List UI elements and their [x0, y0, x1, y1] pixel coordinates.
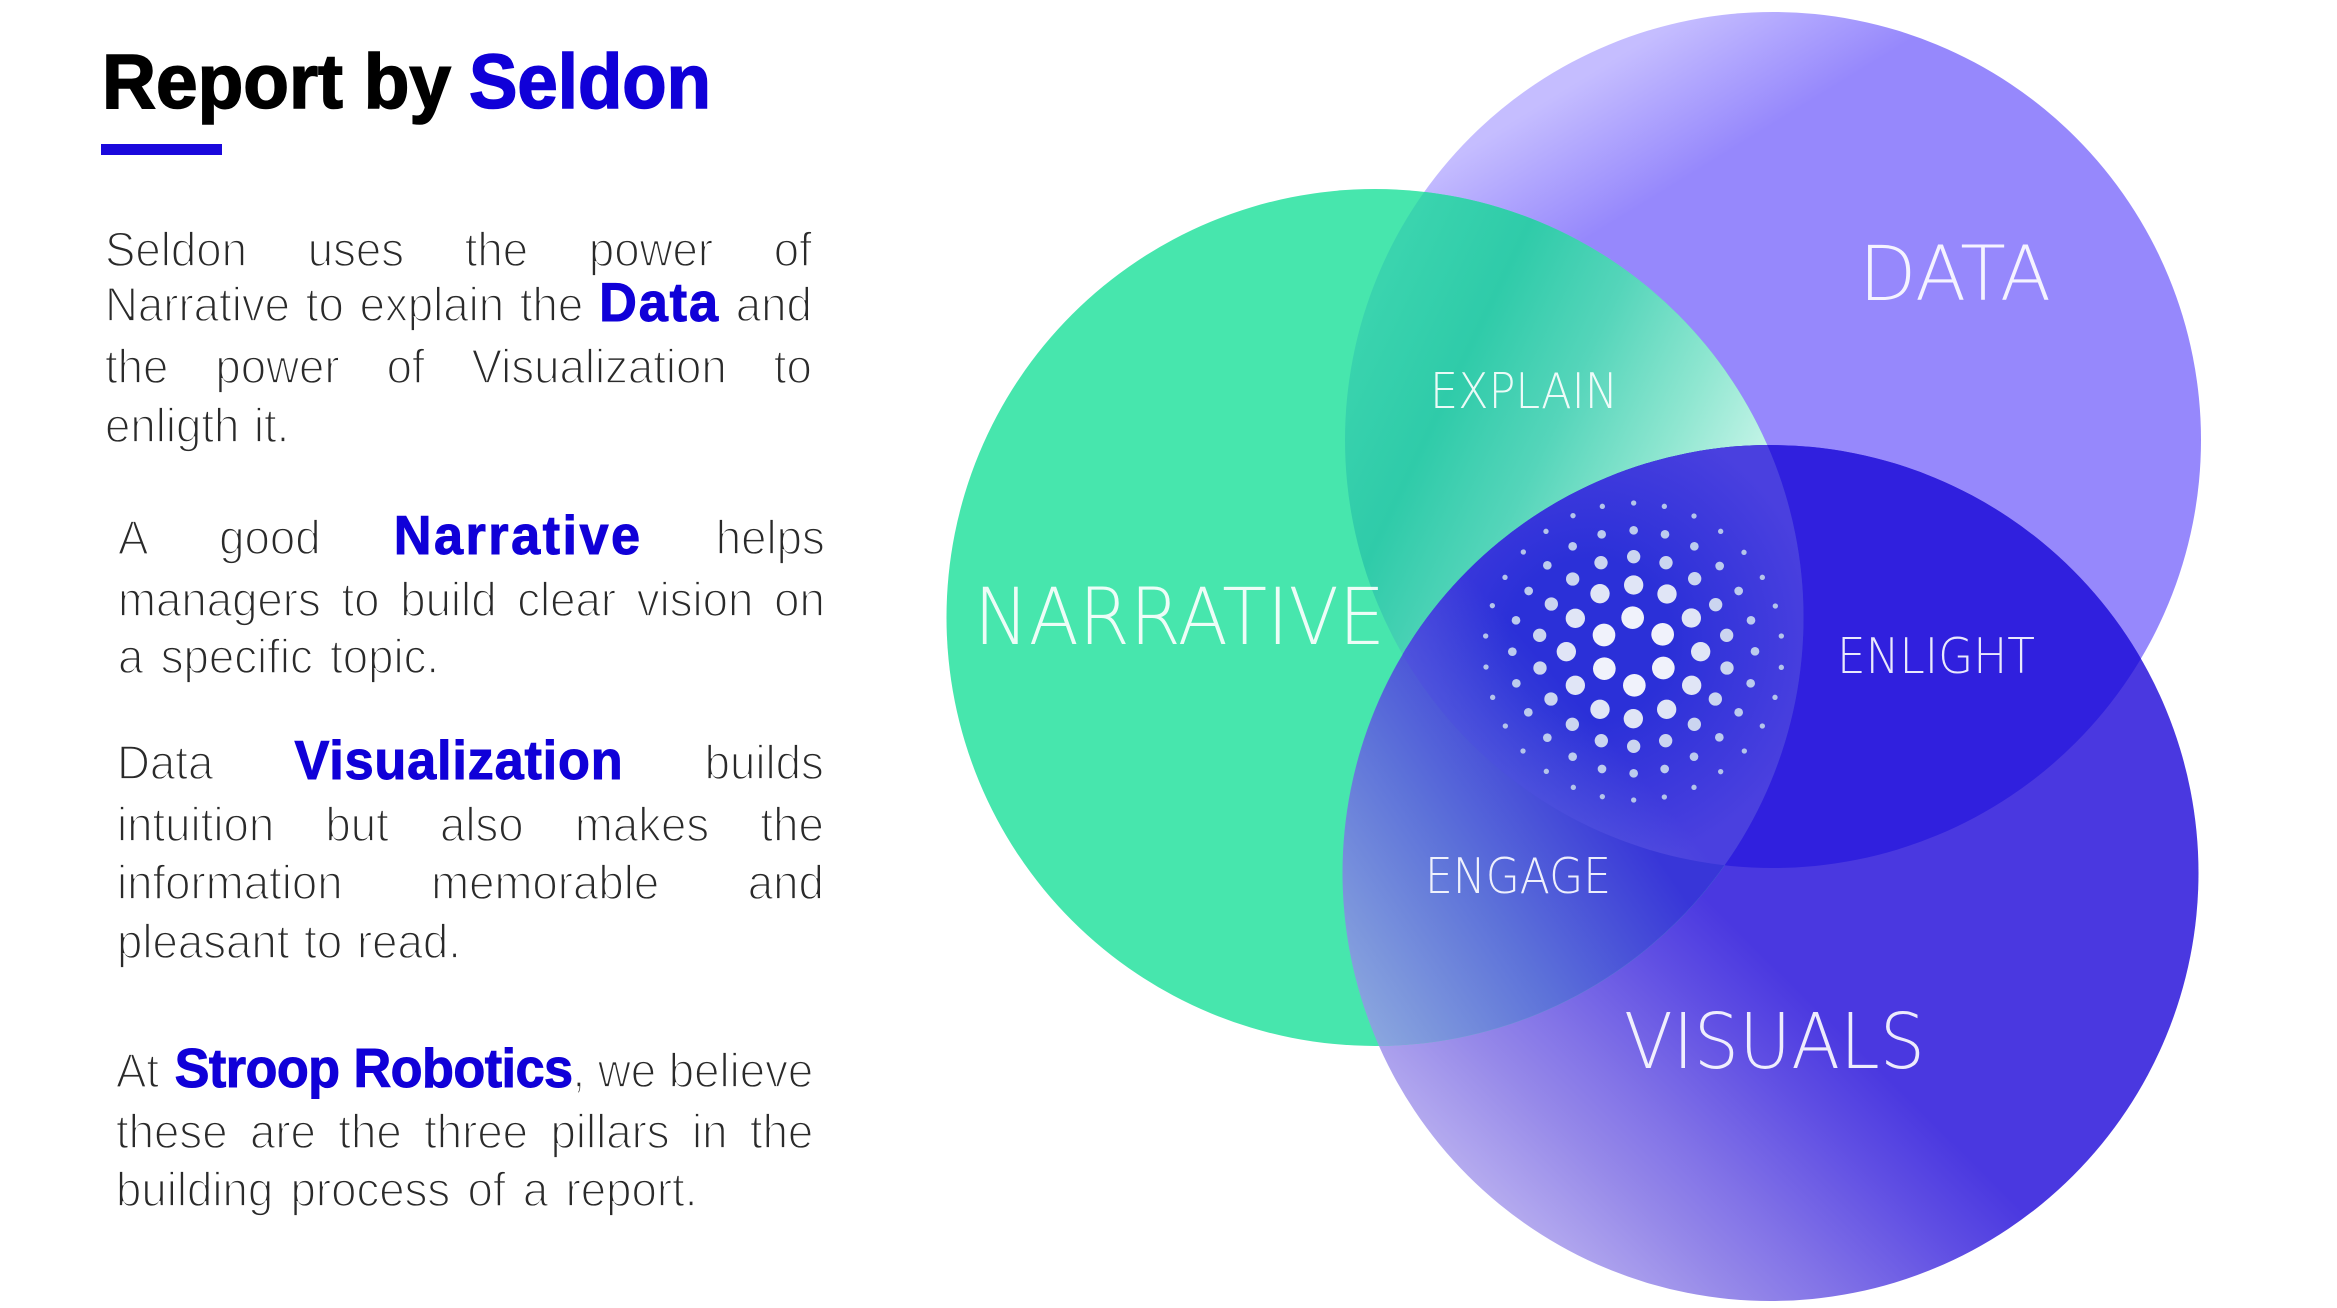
- title: Seldon: [469, 39, 711, 125]
- text block: visualization: pleasant to read.: [117, 916, 461, 969]
- circle: visuals: [1342, 445, 2198, 1301]
- label: visuals: VISUALS: [1624, 998, 1925, 1087]
- text block: visualization: intuition but also makes the: [117, 799, 824, 852]
- circle: narrative: [946, 189, 1804, 1046]
- label: explain: EXPLAIN: [1430, 363, 1618, 420]
- overlap: engage: [1342, 445, 1760, 1046]
- text block: narrative: [118, 504, 825, 684]
- text block: stroop robotics: building process of a report.: [116, 1164, 697, 1217]
- text block: visualization: [117, 729, 824, 969]
- text block: narrative: A good Narrative helps: [118, 504, 825, 566]
- label: data: DATA: [1859, 229, 2051, 318]
- overlap: explain: [1345, 192, 1768, 654]
- text block: narrative: managers to build clear vision on: [118, 574, 825, 627]
- text block: intro: Seldon uses the power of: [105, 224, 812, 277]
- text block: narrative: a specific topic.: [118, 631, 439, 684]
- label: engage: ENGAGE: [1425, 848, 1611, 905]
- venn diagram: [946, 12, 2210, 1301]
- title: [102, 39, 711, 125]
- text block: stroop robotics: At Stroop Robotics, we believe: [116, 1037, 813, 1099]
- title: Report by: [102, 39, 451, 125]
- text block: visualization: Data Visualization builds: [117, 729, 824, 791]
- title underline: [101, 144, 222, 155]
- text block: intro: enligth it.: [105, 400, 289, 453]
- icon: dot sphere: [1483, 500, 1784, 803]
- text block: stroop robotics: [116, 1037, 813, 1217]
- text block: stroop robotics: these are the three pillars in the: [116, 1106, 813, 1159]
- label: enlight: ENLIGHT: [1837, 628, 2035, 685]
- overlap: enlight: [1402, 445, 2141, 868]
- text block: intro: the power of Visualization to: [105, 341, 812, 394]
- text block: intro: [105, 224, 812, 453]
- circle: data: [1345, 12, 2201, 868]
- overlap: centre: [1402, 445, 1804, 865]
- text block: intro: Narrative to explain the Data and: [105, 271, 812, 333]
- label: narrative: NARRATIVE: [974, 573, 1385, 663]
- text block: visualization: information memorable and: [117, 857, 824, 910]
